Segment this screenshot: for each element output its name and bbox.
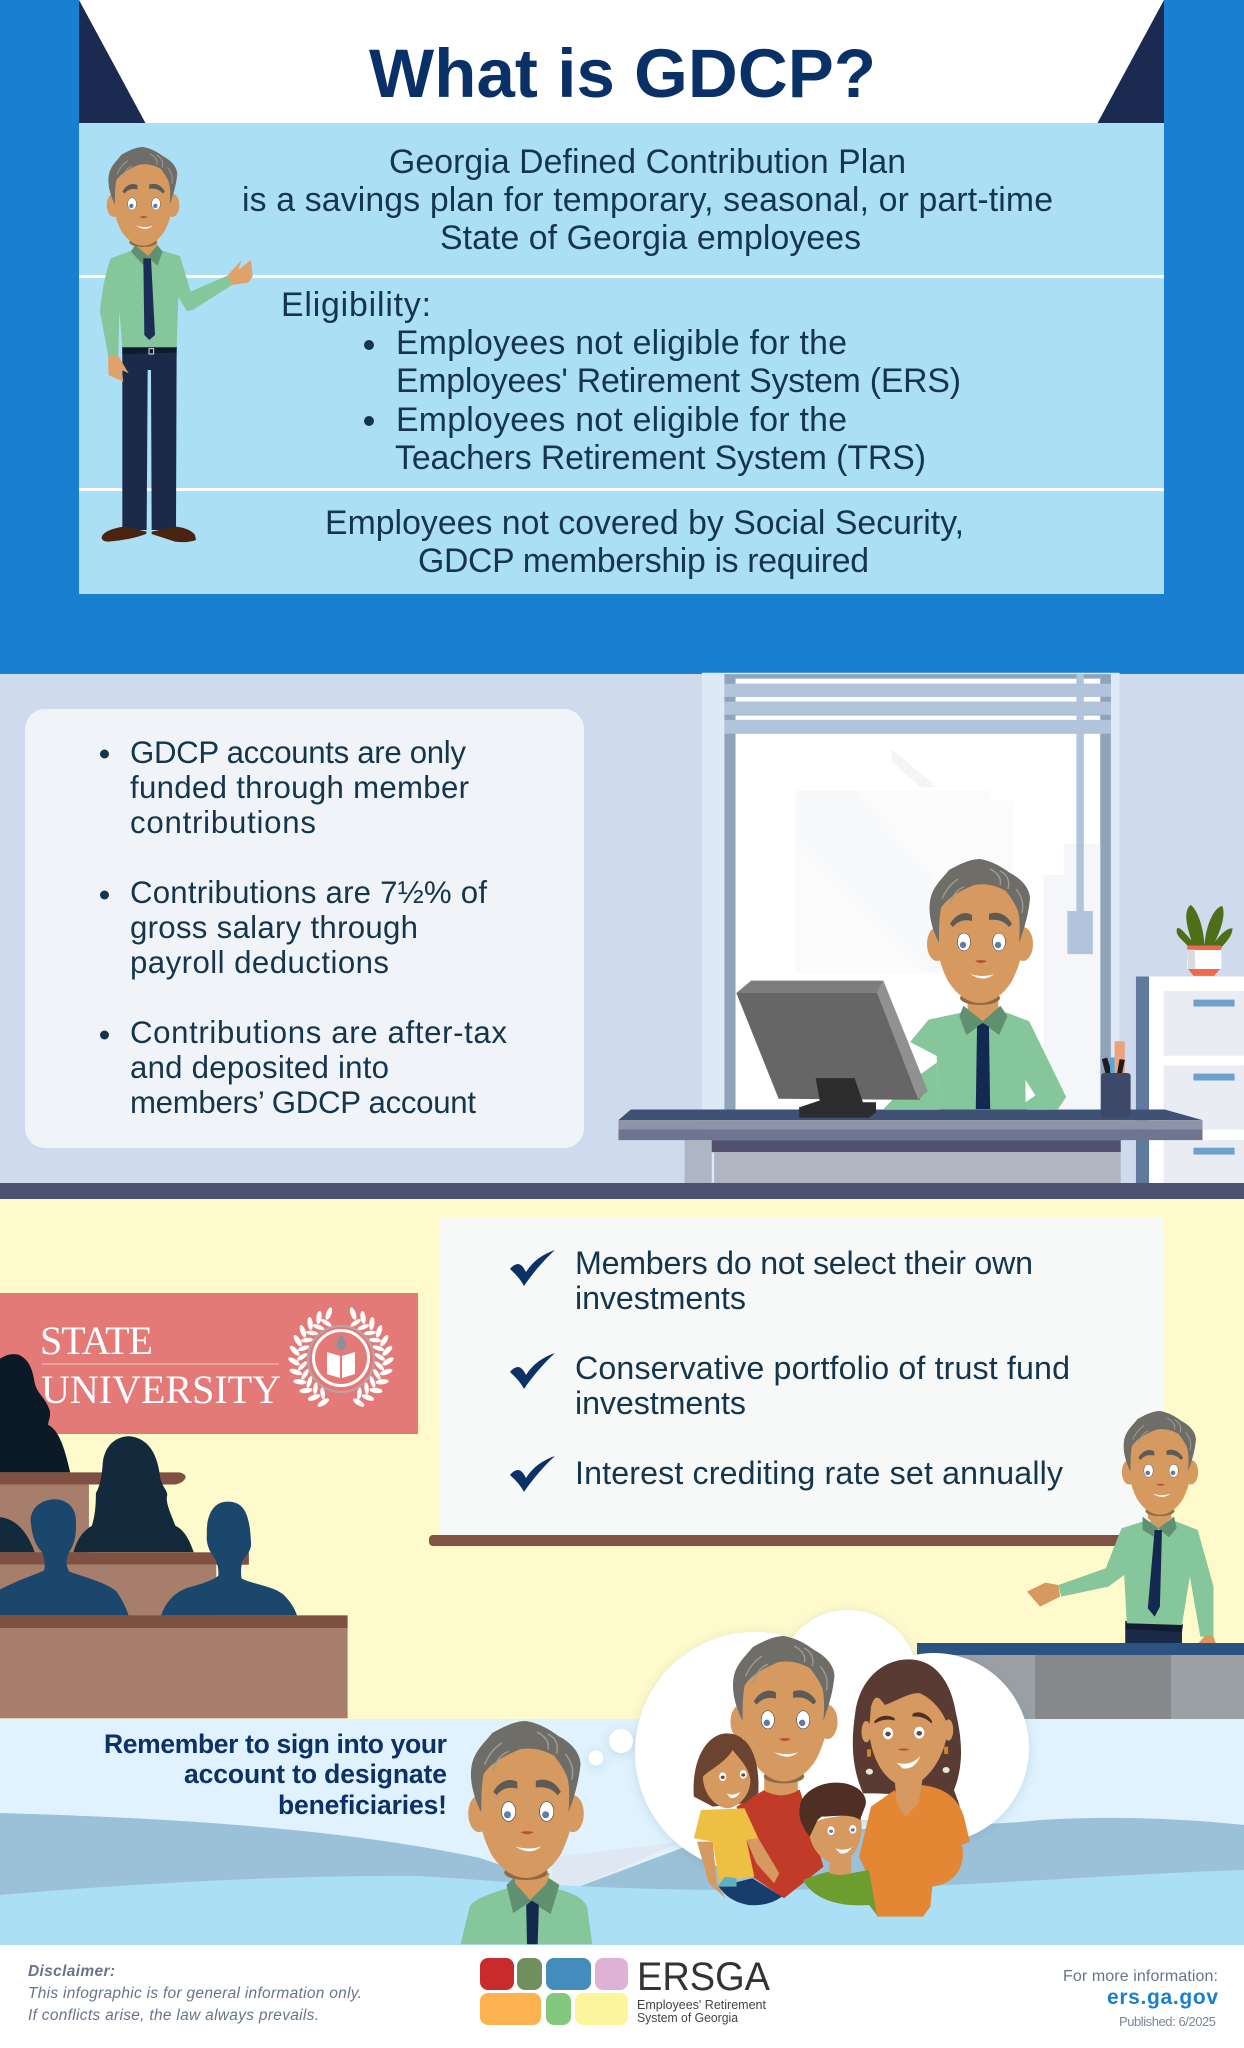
banner: State University: STATE	[40, 1318, 153, 1363]
text block: funding: contributions	[130, 805, 316, 840]
text block: contact information	[1063, 1968, 1218, 2029]
text block: contribution rate: payroll deductions	[130, 945, 389, 980]
icon: family illustration	[694, 1636, 970, 1917]
text block: conservative portfolio: investments	[575, 1385, 746, 1421]
footer background	[0, 1945, 1244, 2048]
icon: man thinking	[461, 1721, 592, 1944]
text block: disclaimer	[28, 1963, 362, 2024]
panel: what is GDCP	[79, 123, 1164, 594]
text block: eligibility: Eligibility:	[281, 286, 431, 324]
text block: eligibility: Employees not eligible for the	[396, 324, 847, 362]
file cabinet with plant	[1136, 905, 1244, 1183]
text block: social security note	[325, 504, 964, 580]
landscape waves	[0, 1813, 1244, 1945]
text block: social security note: Employees not covered by Social Security,	[325, 504, 964, 542]
presenter desk	[917, 1643, 1244, 1719]
son	[799, 1783, 877, 1915]
text block: after-tax: Contributions are after-tax	[130, 1015, 507, 1050]
title banner	[79, 0, 1164, 124]
icon: man at desk	[883, 859, 1066, 1111]
icon: standing man pointing	[100, 147, 253, 542]
father	[737, 1777, 824, 1898]
logo: ERSGA: System of Georgia	[637, 2010, 739, 2025]
text block: plan definition: is a savings plan for temporary, seasonal, or part-time	[242, 181, 1053, 219]
text block: interest crediting: Interest crediting rate set annually	[575, 1455, 1064, 1491]
text block: members do not select	[575, 1245, 1033, 1316]
text block: social security note: GDCP membership is required	[418, 542, 869, 580]
audience: front desk	[0, 1615, 348, 1718]
section background: office	[0, 674, 1244, 1183]
text block: funding	[100, 735, 469, 840]
text block: plan definition: State of Georgia employees	[440, 219, 861, 257]
daughter	[694, 1733, 782, 1905]
text block: contribution rate: gross salary through	[130, 910, 418, 945]
text block: disclaimer: This infographic is for general information only.	[28, 1985, 362, 2002]
section background: blue header band	[0, 0, 1244, 674]
text block: eligibility: Teachers Retirement System (TRS)	[395, 439, 926, 477]
audience: back row desk and silhouettes	[0, 1354, 194, 1553]
text block: after-tax: and deposited into	[130, 1050, 389, 1085]
banner: State University: UNIVERSITY	[41, 1367, 281, 1412]
text block: after-tax	[100, 1015, 507, 1120]
woman	[853, 1659, 970, 1917]
text block: eligibility: Employees' Retirement System (ERS)	[396, 362, 961, 400]
text block: contact information: For more information:	[1063, 1968, 1218, 1985]
text block: beneficiaries reminder: beneficiaries!	[278, 1790, 447, 1820]
text block: conservative portfolio	[575, 1350, 1070, 1421]
icon: presenter man	[1027, 1411, 1216, 1645]
thought bubble	[588, 1610, 1029, 1872]
logo: ERSGA: Employees' Retirement	[637, 1997, 766, 2012]
icon: university emblem	[287, 1307, 395, 1408]
text block: contact information: Published: 6/2025	[1119, 2014, 1216, 2029]
text block: members do not select: Members do not select their own	[575, 1245, 1033, 1281]
icon: checkmark 1	[510, 1250, 555, 1286]
title: What is GDCP?	[369, 35, 876, 112]
floor strip	[0, 1183, 1244, 1199]
text block: plan definition	[242, 143, 1053, 257]
text block: beneficiaries reminder	[104, 1729, 447, 1820]
text block: disclaimer: If conflicts arise, the law always prevails.	[28, 2007, 319, 2024]
text block: conservative portfolio: Conservative portfolio of trust fund	[575, 1350, 1070, 1386]
text block: disclaimer: Disclaimer:	[28, 1963, 115, 1980]
text block: funding: funded through member	[130, 770, 469, 805]
panel: whiteboard	[429, 1217, 1164, 1546]
text block: eligibility: Employees not eligible for the	[396, 401, 847, 439]
text block: beneficiaries reminder: Remember to sign into your	[104, 1729, 447, 1759]
icon: checkmark 2	[510, 1353, 555, 1389]
text block: eligibility	[281, 286, 961, 477]
text block: after-tax: members’ GDCP account	[130, 1085, 476, 1120]
icon: checkmark 3	[510, 1456, 555, 1492]
banner: State University	[0, 1293, 418, 1434]
text block: funding: GDCP accounts are only	[130, 735, 466, 770]
text block: contribution rate: Contributions are 7½% of	[130, 875, 487, 910]
panel: contribution bullets	[25, 709, 584, 1148]
section background: beneficiaries	[0, 1719, 1244, 1945]
text block: plan definition: Georgia Defined Contribution Plan	[389, 143, 906, 181]
text block: contact information: ers.ga.gov	[1107, 1986, 1218, 2009]
text block: beneficiaries reminder: account to designate	[184, 1759, 447, 1789]
icon: pencil cup	[1101, 1041, 1131, 1118]
audience: middle row desk and silhouettes	[0, 1499, 297, 1616]
logo: ERSGA	[480, 1955, 770, 2025]
text block: members do not select: investments	[575, 1280, 746, 1316]
office window with blinds	[702, 673, 1120, 1182]
logo: ERSGA: ERSGA	[637, 1955, 770, 1999]
section background: classroom	[0, 1199, 1244, 1719]
desk	[618, 1107, 1202, 1183]
text block: contribution rate	[100, 875, 487, 980]
computer monitor	[736, 981, 928, 1118]
